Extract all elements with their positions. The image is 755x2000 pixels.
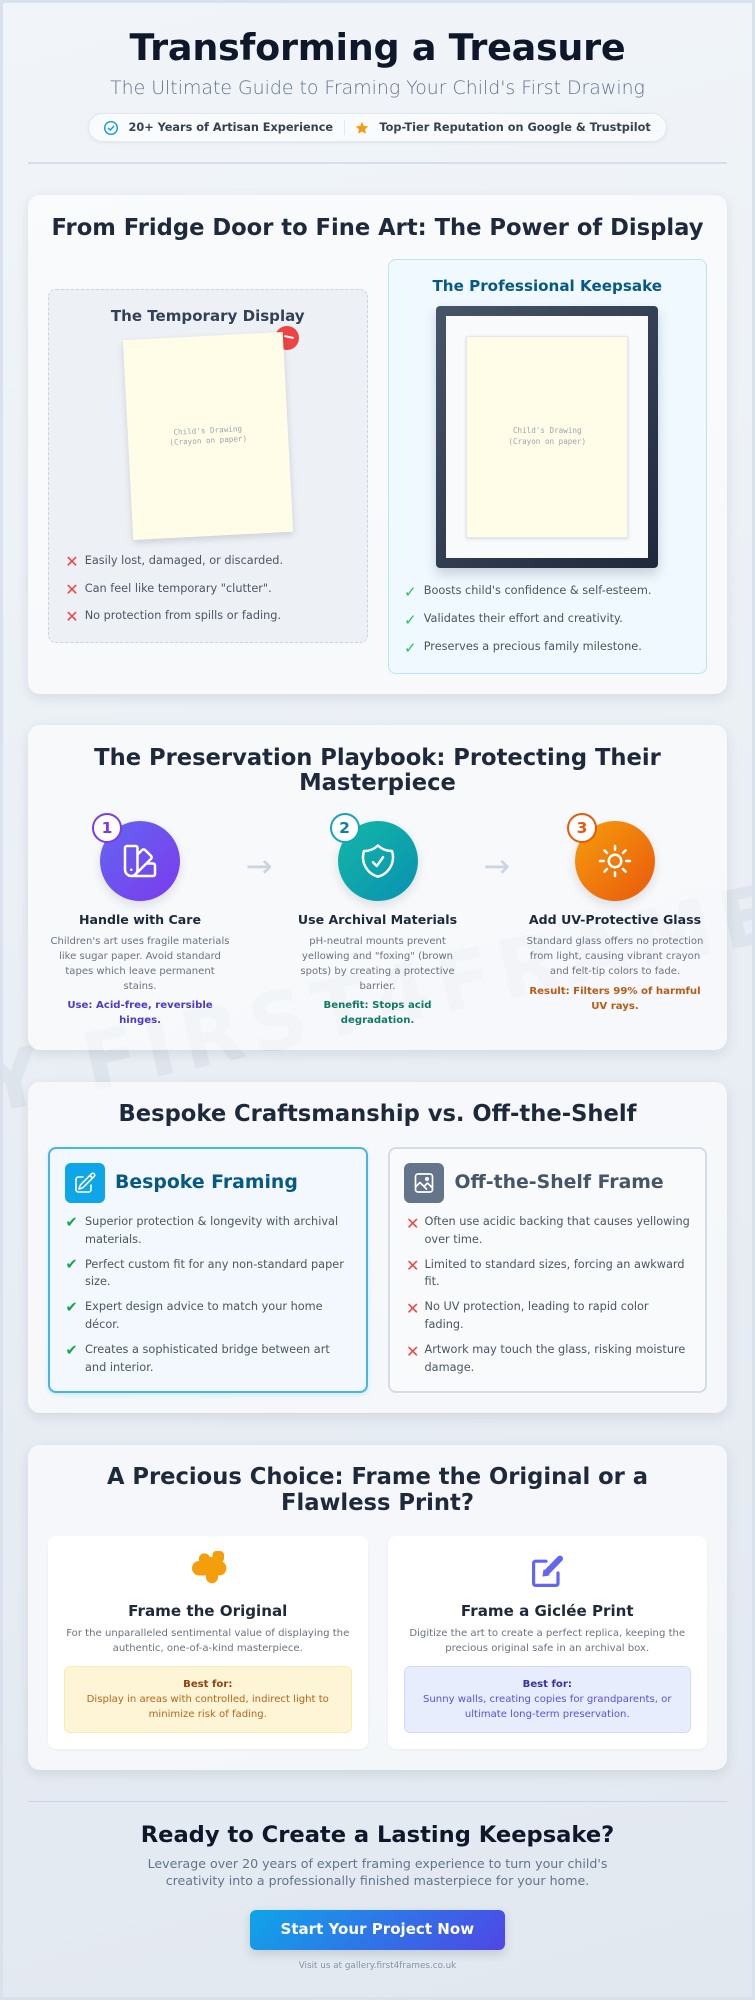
step text [300, 936, 455, 992]
step number: 3 [577, 819, 587, 837]
drawback: No UV protection, leading to rapid color [424, 1300, 649, 1313]
call to action button [250, 1910, 505, 1950]
option title: Frame a Giclée Print [461, 1602, 634, 1620]
heading: Bespoke Craftsmanship vs. Off-the-Shelf [119, 1101, 636, 1127]
step 3 [527, 813, 703, 1012]
benefit [66, 1257, 344, 1288]
drawing on paper: (Crayon on paper) [169, 434, 247, 447]
option text [66, 1628, 349, 1654]
drawback [406, 1299, 649, 1331]
benefit: Validates their effort and creativity. [424, 612, 623, 625]
step text: like sugar paper. Avoid standard [59, 951, 221, 962]
drawback [65, 552, 283, 571]
drawback: Can feel like temporary "clutter". [85, 582, 272, 595]
drawback: fading. [424, 1318, 464, 1331]
icon: sun [575, 821, 655, 901]
title: Transforming a Treasure [130, 26, 625, 68]
benefit: Superior protection & longevity with archival [85, 1215, 338, 1228]
subtitle: The Ultimate Guide to Framing Your Child's First Drawing [110, 77, 645, 99]
benefit: size. [85, 1275, 110, 1288]
artwork: (Crayon on paper) [508, 437, 586, 446]
icon: star [356, 122, 368, 134]
panel: bespoke framing [48, 1147, 368, 1393]
panel title: Bespoke Framing [115, 1172, 298, 1193]
step note: UV rays. [591, 1001, 639, 1012]
panel heading: The Professional Keepsake [432, 277, 662, 295]
badge text: reputation: Top-Tier Reputation on Google & Trustpilot [379, 121, 651, 134]
benefit: ✓ [404, 639, 417, 657]
artwork: Child's Drawing [513, 426, 582, 435]
benefit: ✔ [66, 1215, 78, 1231]
benefit: décor. [85, 1318, 119, 1331]
drawback: No protection from spills or fading. [85, 609, 281, 622]
best for callout: Sunny walls, creating copies for grandparents, or [423, 1694, 672, 1705]
benefit [404, 639, 642, 657]
heading: From Fridge Door to Fine Art: The Power of Display [52, 215, 703, 241]
arrow: → [483, 847, 510, 885]
mat [446, 316, 648, 558]
benefit: Perfect custom fit for any non-standard paper [85, 1258, 344, 1271]
option text [409, 1628, 685, 1654]
drawback [406, 1256, 685, 1288]
benefit: ✔ [66, 1343, 78, 1359]
footer text: creativity into a professionally finished masterpiece for your home. [166, 1873, 589, 1888]
artwork [466, 336, 628, 538]
benefit: Expert design advice to match your home [85, 1300, 323, 1313]
benefit: ✔ [66, 1257, 78, 1273]
benefits list [404, 583, 651, 657]
icon: edit [532, 1556, 563, 1587]
drawback: over time. [424, 1233, 482, 1246]
benefit: materials. [85, 1233, 142, 1246]
icon: shield [338, 821, 418, 901]
step text: and felt-tip colors to fade. [550, 966, 680, 977]
icon: swatch [100, 821, 180, 901]
step number [330, 813, 360, 843]
heading: A Precious Choice: Frame the Original or a [107, 1464, 648, 1490]
panel: professional keepsake [388, 259, 707, 674]
benefit [404, 611, 623, 629]
option text: precious original safe in an archival box. [445, 1643, 649, 1654]
heading: Flawless Print? [281, 1490, 474, 1516]
drawback [406, 1342, 685, 1374]
drawback: fit. [424, 1275, 440, 1288]
drawback [406, 1214, 690, 1246]
heading [107, 1464, 648, 1516]
option text: Digitize the art to create a perfect replica, keeping the [409, 1628, 685, 1639]
drawback: ✕ [65, 552, 79, 571]
heading: The Preservation Playbook: Protecting Their [94, 745, 661, 771]
panel title: Off-the-Shelf Frame [454, 1172, 664, 1193]
drawback: Easily lost, damaged, or discarded. [85, 554, 283, 567]
best for callout: Best for: [183, 1679, 232, 1690]
drawback: ✕ [406, 1342, 419, 1361]
drawing on paper [123, 332, 293, 540]
step text: spots) by creating a protective [300, 966, 455, 977]
benefit: Boosts child's confidence & self-esteem. [424, 584, 651, 597]
framed drawing [436, 306, 658, 568]
panel heading: The Temporary Display [111, 307, 305, 325]
panel: bespoke vs off-the-shelf [28, 1082, 727, 1413]
benefit: Preserves a precious family milestone. [424, 640, 642, 653]
benefit [66, 1300, 323, 1331]
panel: preservation playbook [28, 725, 727, 1050]
footer heading: Ready to Create a Lasting Keepsake? [141, 1822, 614, 1848]
benefit: ✔ [66, 1300, 78, 1316]
icon: paint splat [192, 1551, 226, 1584]
best for callout: Best for: [523, 1679, 572, 1690]
step note [323, 1000, 432, 1026]
step 2 [298, 813, 457, 1026]
step note: Result: Filters 99% of harmful [529, 986, 701, 997]
step title: Handle with Care [79, 912, 201, 927]
step text: stains. [124, 981, 156, 992]
benefit: and interior. [85, 1361, 153, 1374]
footer text: Leverage over 20 years of expert framing experience to turn your child's [148, 1856, 607, 1871]
panel: a precious choice [28, 1444, 727, 1770]
benefit: ✓ [404, 611, 417, 629]
drawing on paper: Child's Drawing [173, 424, 242, 436]
benefit: Creates a sophisticated bridge between art [85, 1343, 330, 1356]
best for callout [64, 1666, 352, 1733]
step title: Add UV-Protective Glass [529, 912, 701, 927]
step title: Use Archival Materials [298, 912, 457, 927]
benefit: ✓ [404, 583, 417, 601]
website: Visit us at gallery.first4frames.co.uk [299, 1961, 456, 1971]
trust badge pill [88, 113, 667, 142]
step text: from light, causing vibrant crayon [530, 951, 700, 962]
icon: red pin [274, 326, 298, 350]
step note [67, 1000, 213, 1026]
step number [567, 813, 597, 843]
drawback [65, 607, 281, 626]
best for callout: ultimate long-term preservation. [465, 1709, 630, 1720]
drawback: damage. [424, 1361, 474, 1374]
heading [94, 745, 661, 796]
drawback: ✕ [65, 580, 79, 599]
step note: Benefit: Stops acid [323, 1000, 432, 1011]
badge text: experience: 20+ Years of Artisan Experience [128, 121, 333, 134]
step number [92, 813, 122, 843]
panel: frame a giclée print [388, 1536, 707, 1749]
benefit [66, 1215, 338, 1246]
step 1 [51, 813, 229, 1026]
step number: 1 [102, 819, 112, 837]
drawback: ✕ [65, 607, 79, 626]
benefit [404, 583, 651, 601]
option text: authentic, one-of-a-kind masterpiece. [113, 1643, 303, 1654]
icon: pencil tile [65, 1163, 105, 1203]
panel: power of display [28, 195, 727, 694]
best for callout: Display in areas with controlled, indirect light to [87, 1694, 329, 1705]
step number: 2 [339, 819, 350, 837]
step note [529, 986, 701, 1012]
drawback [65, 580, 272, 599]
best for callout: minimize risk of fading. [149, 1709, 267, 1720]
drawbacks list [65, 552, 283, 626]
drawback: ✕ [406, 1256, 419, 1275]
step text [527, 936, 703, 977]
step text [51, 936, 229, 992]
benefit [66, 1343, 330, 1374]
step text: yellowing and "foxing" (brown [302, 951, 453, 962]
option text: For the unparalleled sentimental value of displaying the [66, 1628, 349, 1639]
drawback: Limited to standard sizes, forcing an awkward [424, 1258, 685, 1271]
step text: Standard glass offers no protection [527, 936, 703, 947]
panel: off-the-shelf frame [388, 1147, 707, 1393]
option title: Frame the Original [128, 1602, 287, 1620]
drawback: Artwork may touch the glass, risking moisture [424, 1343, 685, 1356]
footer text [148, 1856, 607, 1888]
drawback: ✕ [406, 1299, 419, 1318]
step text: barrier. [360, 981, 396, 992]
panel: temporary display [48, 289, 368, 643]
step note: hinges. [119, 1015, 161, 1026]
heading: Masterpiece [299, 770, 456, 796]
drawback: Often use acidic backing that causes yellowing [424, 1215, 690, 1228]
step text: tapes which leave permanent [65, 966, 215, 977]
step text: Children's art uses fragile materials [51, 936, 229, 947]
arrow: → [246, 847, 272, 885]
step note: degradation. [341, 1015, 414, 1026]
best for callout [404, 1666, 691, 1733]
icon: image tile [404, 1163, 444, 1203]
step text: pH-neutral mounts prevent [309, 936, 446, 947]
icon: check badge [104, 121, 118, 135]
drawback: ✕ [406, 1214, 419, 1233]
panel: frame the original [48, 1536, 368, 1749]
call to action button: Start Your Project Now [280, 1920, 474, 1938]
step note: Use: Acid-free, reversible [67, 1000, 213, 1011]
